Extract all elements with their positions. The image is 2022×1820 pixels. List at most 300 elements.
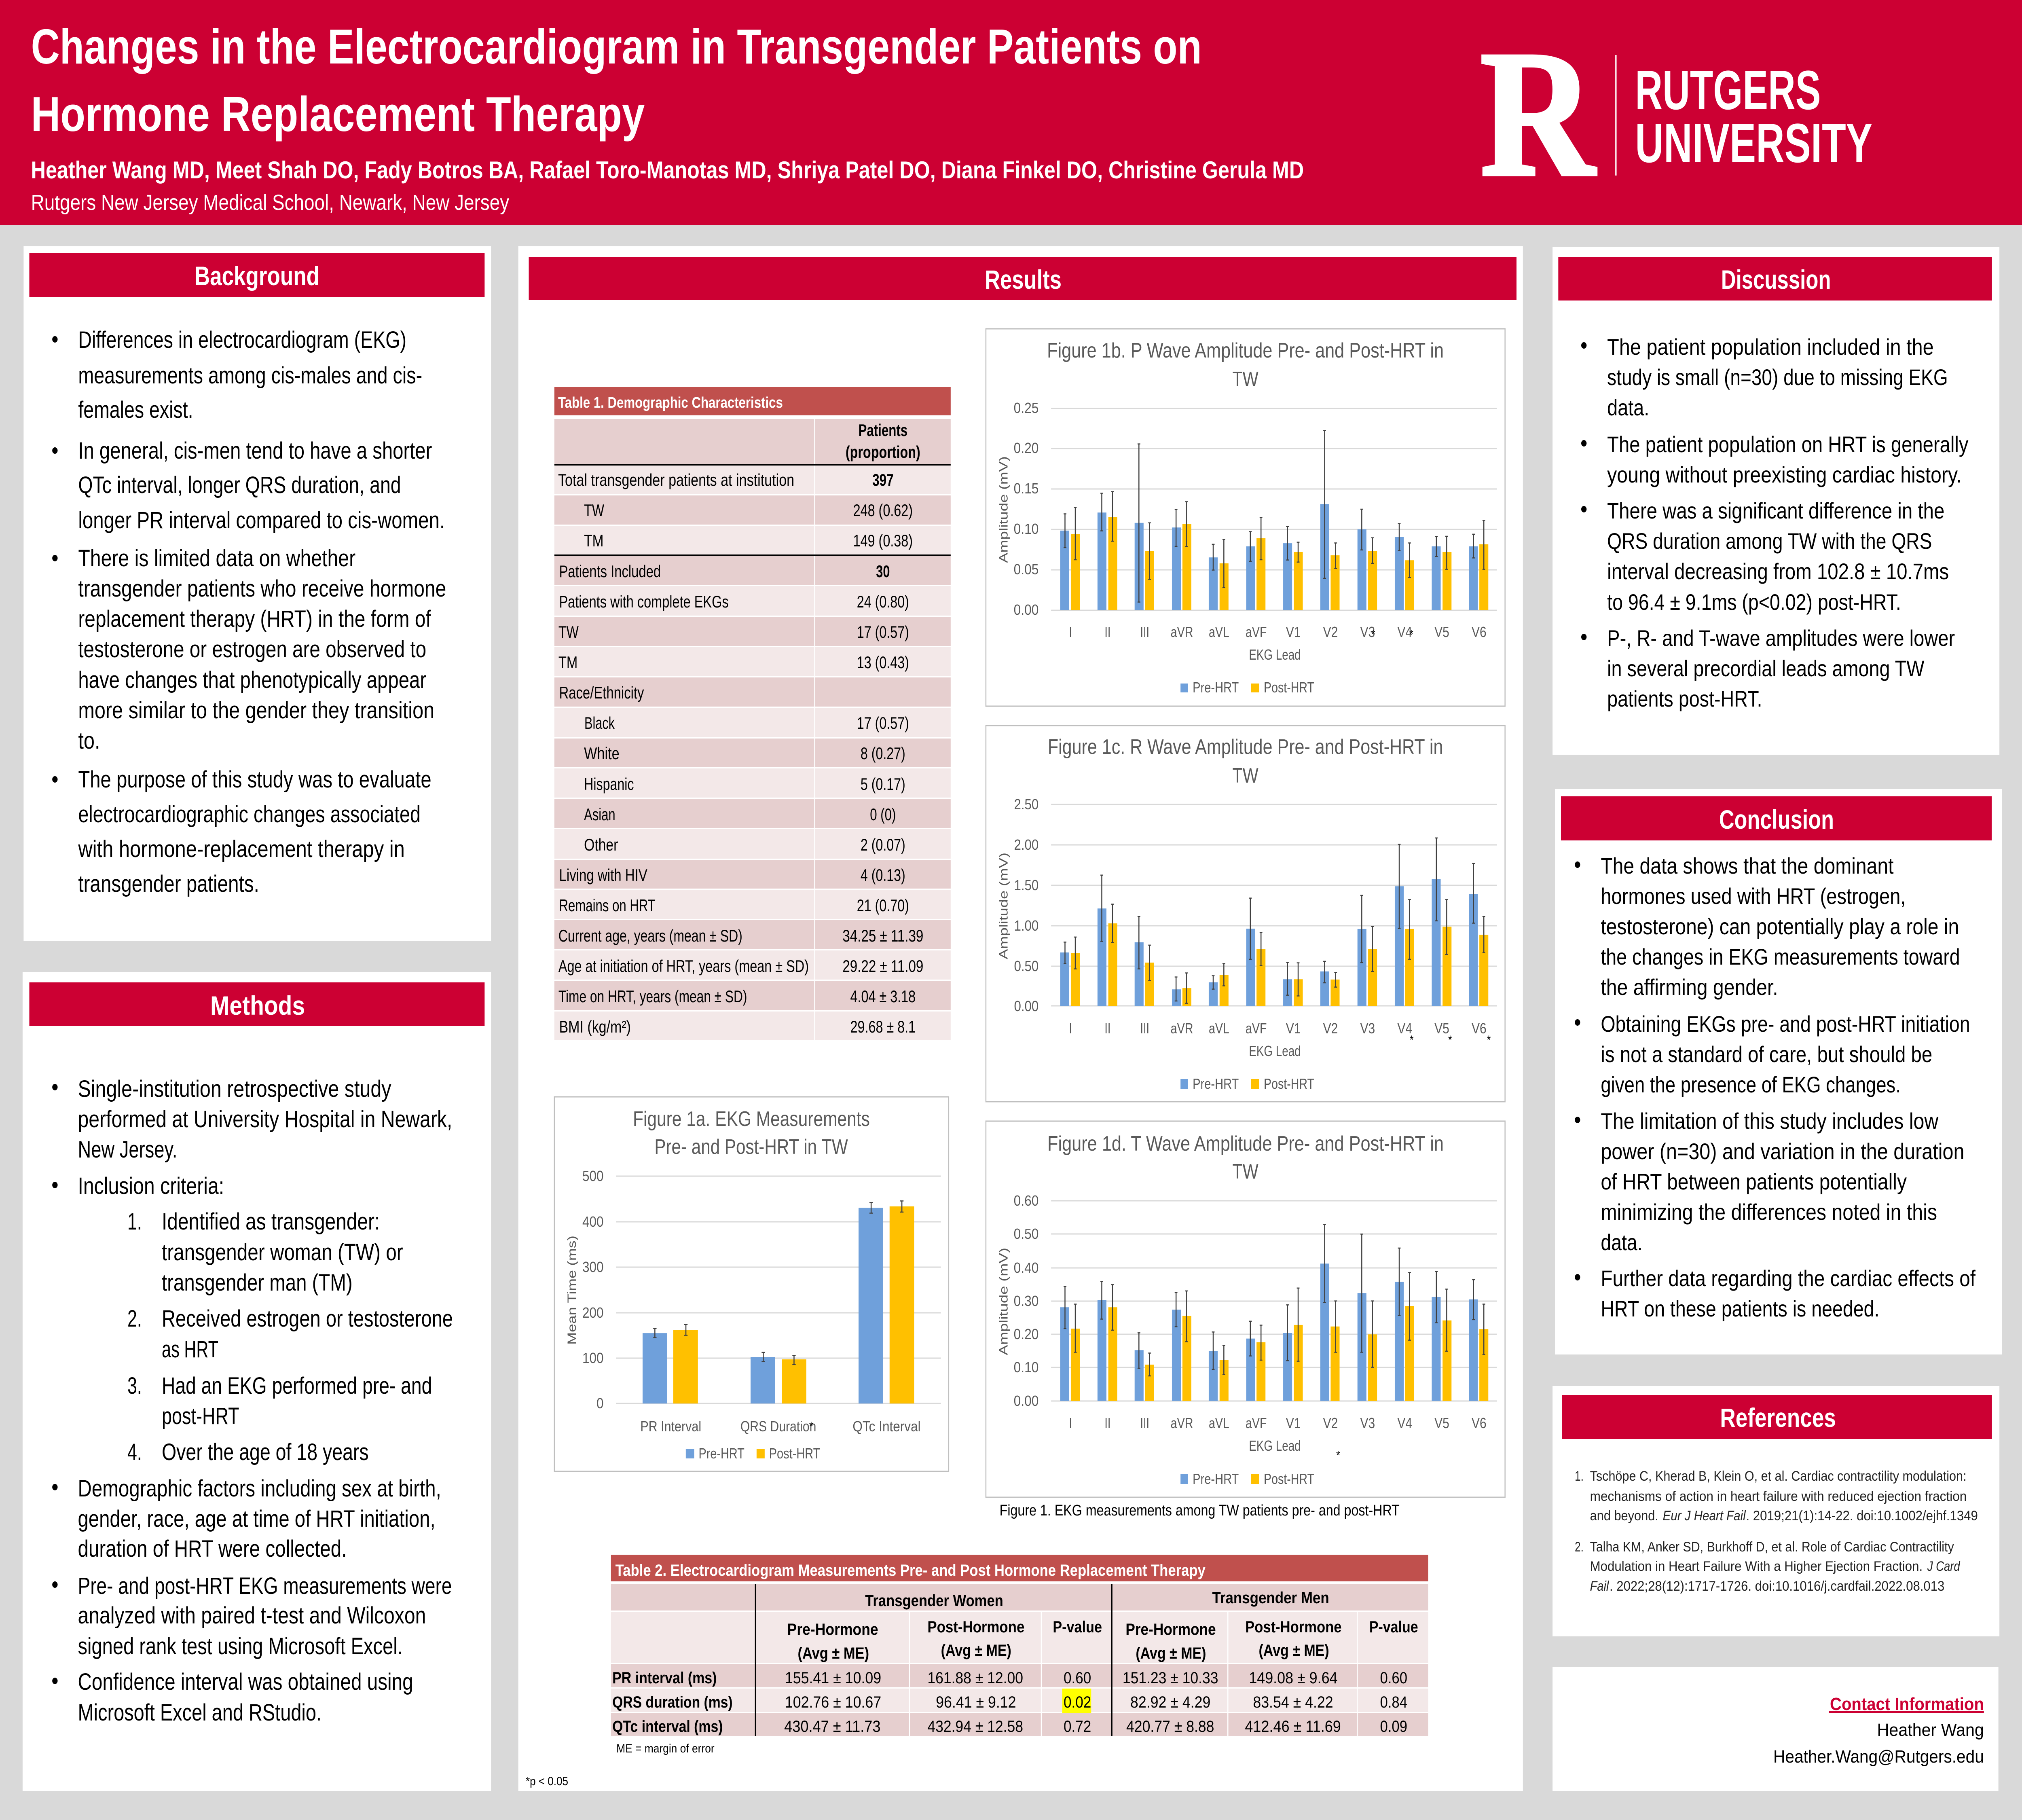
table 1: demographic characteristics: 5 (0.17) bbox=[861, 775, 905, 794]
text block: conclusion bullets: given the presence of EKG changes. bbox=[1601, 1072, 1901, 1097]
table 1: demographic characteristics: 248 (0.62) bbox=[853, 501, 913, 520]
title: Hormone Replacement Therapy bbox=[31, 86, 645, 142]
logo: Rutgers University: RUTGERS bbox=[1635, 59, 1821, 121]
legend 1b: Post-HRT bbox=[1264, 679, 1314, 696]
axis labels 1c: III bbox=[1140, 1020, 1149, 1037]
significance marker 1d: * bbox=[1336, 1448, 1340, 1462]
axis labels 1c bbox=[997, 796, 1487, 1060]
chart title 1a bbox=[633, 1107, 870, 1159]
axis labels 1d: II bbox=[1104, 1415, 1110, 1432]
heading: methods bbox=[29, 982, 484, 1026]
axis labels 1b: EKG Lead bbox=[1249, 647, 1301, 663]
text block: conclusion bullets: data. bbox=[1601, 1230, 1643, 1255]
text block: conclusion bullets: power (n=30) and variation in the duration bbox=[1601, 1139, 1965, 1164]
authors: Heather Wang MD, Meet Shah DO, Fady Botros BA, Rafael Toro-Manotas MD, Shriya Patel DO, Diana Finkel DO, Christine Gerula MD bbox=[31, 157, 1304, 184]
text block: background bullets: replacement therapy (HRT) in the form of bbox=[78, 606, 431, 632]
axis labels 1b: V1 bbox=[1286, 624, 1301, 641]
table 1: demographic characteristics: 397 bbox=[872, 471, 894, 490]
significance markers 1c: * bbox=[1448, 1033, 1452, 1047]
text block: discussion bullets: to 96.4 ± 9.1ms (p<0.02) post-HRT. bbox=[1607, 589, 1901, 615]
table 2: electrocardiogram measurements: 0.72 bbox=[1064, 1717, 1091, 1735]
text block: background bullets: measurements among cis-males and cis- bbox=[78, 363, 422, 389]
table 2: electrocardiogram measurements bbox=[611, 1555, 1428, 1736]
text block: conclusion bullets: The data shows that the dominant bbox=[1601, 853, 1893, 878]
table 2: electrocardiogram measurements: 151.23 ± 10.33 bbox=[1123, 1669, 1218, 1687]
axis labels 1d: V3 bbox=[1360, 1415, 1375, 1432]
table 1: demographic characteristics: Race/Ethnicity bbox=[559, 684, 644, 703]
table 2: electrocardiogram measurements: (Avg ± ME) bbox=[1136, 1644, 1206, 1662]
panel: background bbox=[23, 246, 491, 941]
axis labels 1b: 0.25 bbox=[1014, 400, 1038, 417]
axis labels 1c: V3 bbox=[1360, 1020, 1375, 1037]
table 2: electrocardiogram measurements: 102.76 ± 10.67 bbox=[785, 1693, 881, 1711]
logo: Rutgers University: R bbox=[1480, 14, 1597, 214]
table 2: electrocardiogram measurements: 0.09 bbox=[1380, 1717, 1407, 1735]
heading: results: Results bbox=[985, 265, 1062, 294]
table 2: electrocardiogram measurements: 420.77 ± 8.88 bbox=[1126, 1717, 1214, 1735]
table 1: demographic characteristics: 34.25 ± 11.39 bbox=[842, 927, 923, 946]
text block: reference list: 2. bbox=[1575, 1539, 1584, 1555]
table 1: demographic characteristics: 29.22 ± 11.09 bbox=[842, 957, 923, 976]
legend 1c: Pre-HRT bbox=[1193, 1076, 1239, 1092]
axis labels 1d: 0.00 bbox=[1014, 1393, 1038, 1409]
heading: references: References bbox=[1720, 1403, 1836, 1433]
significance markers 1c: * bbox=[1487, 1033, 1491, 1047]
significance footnote: *p < 0.05 bbox=[526, 1774, 568, 1788]
axis labels 1a bbox=[565, 1168, 921, 1435]
axis labels 1d: Amplitude (mV) bbox=[997, 1248, 1011, 1355]
axis labels 1c: 1.50 bbox=[1014, 877, 1038, 894]
legend 1a bbox=[686, 1445, 820, 1462]
text block: methods bullets: 3. bbox=[127, 1373, 142, 1399]
table 2: electrocardiogram measurements: Post-Hormone bbox=[1245, 1618, 1342, 1636]
text block: methods bullets: Demographic factors including sex at birth, bbox=[78, 1476, 441, 1502]
table 1: demographic characteristics: 4.04 ± 3.18 bbox=[850, 987, 916, 1006]
text block: methods bullets: 1. bbox=[127, 1209, 142, 1235]
axis labels 1d: aVF bbox=[1246, 1415, 1267, 1432]
axis labels 1b: aVL bbox=[1209, 624, 1229, 641]
table 1: demographic characteristics: 4 (0.13) bbox=[861, 866, 905, 885]
text block: methods bullets: Single-institution retrospective study bbox=[78, 1076, 391, 1102]
axis labels 1d: 0.20 bbox=[1014, 1326, 1038, 1343]
logo: Rutgers University bbox=[1480, 14, 1872, 214]
table 1: demographic characteristics: 17 (0.57) bbox=[857, 623, 909, 642]
bars 1c bbox=[1064, 838, 1485, 1006]
axis labels 1d: III bbox=[1140, 1415, 1149, 1432]
table 2: electrocardiogram measurements: QTc interval (ms) bbox=[612, 1717, 723, 1735]
heading: results bbox=[529, 257, 1516, 300]
axis labels 1b: 0.15 bbox=[1014, 480, 1038, 497]
text block: discussion bullets: The patient population on HRT is generally bbox=[1607, 432, 1969, 457]
text block: background bullets: to. bbox=[78, 728, 100, 754]
axis labels 1b: 0.00 bbox=[1014, 602, 1038, 618]
legend 1b bbox=[1180, 679, 1314, 696]
chart title 1d: Figure 1d. T Wave Amplitude Pre- and Post-HRT in bbox=[1047, 1132, 1444, 1155]
chart title 1c: TW bbox=[1233, 764, 1258, 787]
text block: background bullets: females exist. bbox=[78, 397, 193, 423]
significance markers 1b: * bbox=[1409, 627, 1413, 641]
contact details: Heather Wang bbox=[1877, 1720, 1984, 1740]
table 1: demographic characteristics: Patients with complete EKGs bbox=[559, 593, 729, 612]
text block: methods bullets: transgender man (TM) bbox=[162, 1270, 353, 1296]
text block: discussion bullets: P-, R- and T-wave amplitudes were lower bbox=[1607, 625, 1955, 651]
text block: reference list: mechanisms of action in heart failure with reduced ejection fraction bbox=[1590, 1489, 1967, 1504]
chart title 1d: TW bbox=[1233, 1160, 1258, 1183]
text block: methods bullets: analyzed with paired t-test and Wilcoxon bbox=[78, 1603, 426, 1629]
axis labels 1c: V4 bbox=[1397, 1020, 1412, 1037]
axis labels 1a: Mean Time (ms) bbox=[565, 1236, 579, 1345]
table 2: electrocardiogram measurements: Pre-Hormone bbox=[787, 1620, 878, 1638]
contact details: Heather.Wang@Rutgers.edu bbox=[1773, 1746, 1984, 1767]
text block: background bullets: The purpose of this study was to evaluate bbox=[78, 767, 431, 793]
table 1: demographic characteristics: TW bbox=[584, 501, 605, 520]
text block: reference list: J Card bbox=[1927, 1559, 1961, 1574]
axis labels 1a: 100 bbox=[582, 1350, 604, 1367]
text block: background bullets: transgender patients who receive hormone bbox=[78, 576, 446, 602]
text block: discussion bullets: QRS duration among TW with the QRS bbox=[1607, 528, 1932, 554]
legend 1c bbox=[1180, 1076, 1314, 1092]
axis labels 1a: 200 bbox=[582, 1305, 604, 1321]
text block: conclusion bullets: minimizing the differences noted in this bbox=[1601, 1199, 1937, 1225]
axis labels 1a: 400 bbox=[582, 1214, 604, 1230]
text block: reference list: and beyond. bbox=[1590, 1508, 1658, 1524]
table 1: demographic characteristics: TW bbox=[558, 623, 579, 642]
text block: reference list: Talha KM, Anker SD, Burkhoff D, et al. Role of Cardiac Contractility bbox=[1590, 1539, 1954, 1555]
chart title 1b bbox=[1047, 339, 1444, 391]
axis labels 1d: V1 bbox=[1286, 1415, 1301, 1432]
table 2: electrocardiogram measurements: 412.46 ± 11.69 bbox=[1245, 1717, 1341, 1735]
axis labels 1d: 0.60 bbox=[1014, 1193, 1038, 1209]
table 1: demographic characteristics: 21 (0.70) bbox=[857, 896, 909, 915]
heading: discussion: Discussion bbox=[1721, 265, 1831, 294]
text block: methods bullets: performed at University Hospital in Newark, bbox=[78, 1107, 452, 1132]
bars 1a bbox=[653, 1201, 903, 1403]
table 1: demographic characteristics: (proportion) bbox=[846, 443, 920, 462]
text block: background bullets: There is limited data on whether bbox=[78, 546, 355, 571]
text block: background bullets: longer PR interval compared to cis-women. bbox=[78, 508, 445, 533]
table 1: demographic characteristics: 149 (0.38) bbox=[853, 531, 913, 550]
axis labels 1d: EKG Lead bbox=[1249, 1438, 1301, 1454]
text block: methods bullets: Inclusion criteria: bbox=[78, 1173, 224, 1199]
text block: methods bullets: New Jersey. bbox=[78, 1137, 177, 1163]
chart title 1b: TW bbox=[1233, 368, 1258, 391]
axis labels 1b: V5 bbox=[1434, 624, 1449, 641]
panel: results bbox=[518, 246, 1523, 1791]
text block: methods bullets: 2. bbox=[127, 1306, 142, 1332]
significance markers 1c bbox=[1410, 1033, 1491, 1047]
bars 1d bbox=[1064, 1224, 1485, 1401]
table 1: demographic characteristics: TM bbox=[558, 653, 577, 672]
panel: contact information bbox=[1552, 1667, 1999, 1791]
chart: Figure 1a EKG measurements bbox=[554, 1097, 949, 1471]
text block: conclusion bullets: Further data regarding the cardiac effects of bbox=[1601, 1266, 1976, 1291]
text block: background bullets: with hormone-replacement therapy in bbox=[78, 836, 405, 862]
table 2: electrocardiogram measurements: Transgender Women bbox=[865, 1591, 1003, 1610]
axis labels 1c: 2.50 bbox=[1014, 796, 1038, 813]
chart title 1a: Figure 1a. EKG Measurements bbox=[633, 1107, 870, 1131]
text block: reference list bbox=[1575, 1469, 1978, 1594]
legend 1a: Pre-HRT bbox=[699, 1445, 745, 1462]
text block: methods bullets: Over the age of 18 years bbox=[162, 1439, 369, 1465]
axis labels 1c: Amplitude (mV) bbox=[997, 853, 1011, 959]
text block: reference list: Modulation in Heart Failure With a Higher Ejection Fraction. bbox=[1590, 1559, 1923, 1574]
axis labels 1b: II bbox=[1104, 624, 1110, 641]
heading: background: Background bbox=[195, 261, 319, 291]
table 2: electrocardiogram measurements: Post-Hormone bbox=[927, 1618, 1024, 1636]
axis labels 1a: PR Interval bbox=[640, 1418, 701, 1435]
axis labels 1d: 0.30 bbox=[1014, 1293, 1038, 1310]
text block: background bullets: testosterone or estrogen are observed to bbox=[78, 637, 426, 662]
text block: methods bullets: post-HRT bbox=[162, 1403, 239, 1429]
text block: discussion bullets bbox=[1581, 334, 1969, 711]
axis labels 1b: 0.10 bbox=[1014, 521, 1038, 538]
text block: discussion bullets: There was a significant difference in the bbox=[1607, 498, 1944, 523]
text block: background bullets: more similar to the gender they transition bbox=[78, 698, 434, 724]
text block: discussion bullets: study is small (n=30) due to missing EKG bbox=[1607, 364, 1948, 390]
table 2: electrocardiogram measurements: 96.41 ± 9.12 bbox=[936, 1693, 1016, 1711]
text block: conclusion bullets: Obtaining EKGs pre- and post-HRT initiation bbox=[1601, 1011, 1970, 1037]
table 1: demographic characteristics: Asian bbox=[584, 805, 615, 824]
heading: methods: Methods bbox=[210, 990, 305, 1020]
text block: reference list: . 2019;21(1):14-22. doi:10.1002/ejhf.1349 bbox=[1746, 1508, 1978, 1524]
table 1: demographic characteristics: Living with HIV bbox=[559, 866, 647, 885]
axis labels 1b: V6 bbox=[1472, 624, 1487, 641]
table 2: electrocardiogram measurements: PR interval (ms) bbox=[612, 1669, 717, 1687]
text block: conclusion bullets: testosterone) can potentially play a role in bbox=[1601, 914, 1959, 939]
table 2: electrocardiogram measurements: (Avg ± ME) bbox=[1259, 1641, 1329, 1659]
axis labels 1d: V2 bbox=[1323, 1415, 1338, 1432]
table 2: electrocardiogram measurements: 82.92 ± 4.29 bbox=[1130, 1693, 1210, 1711]
table 1: demographic characteristics: Age at initiation of HRT, years (mean ± SD) bbox=[558, 957, 809, 976]
text block: methods bullets: Pre- and post-HRT EKG measurements were bbox=[78, 1573, 452, 1599]
affiliation: Rutgers New Jersey Medical School, Newark, New Jersey bbox=[31, 190, 509, 215]
table 1: demographic characteristics: Other bbox=[584, 836, 618, 855]
axis labels 1c: 0.00 bbox=[1014, 998, 1038, 1015]
axis labels 1c: aVR bbox=[1171, 1020, 1193, 1037]
significance marker 1a: * bbox=[809, 1419, 813, 1433]
chart title 1c: Figure 1c. R Wave Amplitude Pre- and Post-HRT in bbox=[1048, 735, 1443, 759]
axis labels 1c: V6 bbox=[1472, 1020, 1487, 1037]
panel: methods bbox=[23, 972, 491, 1791]
text block: conclusion bullets: HRT on these patients is needed. bbox=[1601, 1296, 1880, 1321]
text block: background bullets: In general, cis-men tend to have a shorter bbox=[78, 438, 432, 464]
text block: background bullets: electrocardiographic changes associated bbox=[78, 802, 421, 827]
axis labels 1b: V2 bbox=[1323, 624, 1338, 641]
text block: background bullets: QTc interval, longer QRS duration, and bbox=[78, 472, 401, 498]
table 1: demographic characteristics: Patients Included bbox=[559, 562, 661, 581]
table 2: electrocardiogram measurements: Table 2. Electrocardiogram Measurements Pre- and Post Hormone Replacement Therapy bbox=[615, 1561, 1206, 1579]
axis labels 1a: 500 bbox=[582, 1168, 604, 1185]
table 1: demographic characteristics: 30 bbox=[876, 562, 890, 581]
axis labels 1c: EKG Lead bbox=[1249, 1043, 1301, 1060]
table 2: electrocardiogram measurements: Pre-Hormone bbox=[1125, 1620, 1216, 1638]
legend 1b: Pre-HRT bbox=[1193, 679, 1239, 696]
text block: background bullets: have changes that phenotypically appear bbox=[78, 667, 426, 693]
axis labels 1c: V5 bbox=[1434, 1020, 1449, 1037]
axis labels 1c: 0.50 bbox=[1014, 958, 1038, 975]
text block: conclusion bullets: of HRT between patients potentially bbox=[1601, 1169, 1907, 1194]
table 1: demographic characteristics: 24 (0.80) bbox=[857, 593, 909, 612]
axis labels 1b: I bbox=[1069, 624, 1072, 641]
panel: conclusion bbox=[1555, 789, 2002, 1354]
axis labels 1c: I bbox=[1069, 1020, 1072, 1037]
axis labels 1d: aVL bbox=[1209, 1415, 1229, 1432]
axis labels 1a: 0 bbox=[596, 1395, 604, 1412]
table 1: demographic characteristics: TM bbox=[584, 531, 604, 550]
text block: methods bullets: signed rank test using Microsoft Excel. bbox=[78, 1634, 403, 1659]
chart: Figure 1b P wave amplitude bbox=[986, 329, 1505, 706]
axis labels 1d: I bbox=[1069, 1415, 1072, 1432]
table 1: demographic characteristics: Time on HRT, years (mean ± SD) bbox=[558, 987, 747, 1006]
table 2: electrocardiogram measurements: 0.60 bbox=[1380, 1669, 1407, 1687]
text block: conclusion bullets: hormones used with HRT (estrogen, bbox=[1601, 883, 1906, 909]
axis labels 1a: 300 bbox=[582, 1259, 604, 1276]
legend 1c: Post-HRT bbox=[1264, 1076, 1314, 1092]
table 2: electrocardiogram measurements: 0.84 bbox=[1380, 1693, 1407, 1711]
axis labels 1d: V6 bbox=[1472, 1415, 1487, 1432]
text block: reference list: Fail bbox=[1590, 1579, 1609, 1594]
table 1: demographic characteristics: 2 (0.07) bbox=[861, 836, 905, 855]
axis labels 1d: V4 bbox=[1397, 1415, 1412, 1432]
figure 1 caption: Figure 1. EKG measurements among TW patients pre- and post-HRT bbox=[1000, 1502, 1400, 1519]
axis labels 1c: aVL bbox=[1209, 1020, 1229, 1037]
text block: methods bullets: as HRT bbox=[162, 1337, 218, 1363]
axis labels 1b: V3 bbox=[1360, 624, 1375, 641]
table 1: demographic characteristics: 0 (0) bbox=[870, 805, 896, 824]
axis labels 1c: 2.00 bbox=[1014, 837, 1038, 853]
axis labels 1c: 1.00 bbox=[1014, 918, 1038, 934]
text block: methods bullets: Received estrogen or testosterone bbox=[162, 1306, 453, 1332]
axis labels 1c: aVF bbox=[1246, 1020, 1267, 1037]
chart title 1a: Pre- and Post-HRT in TW bbox=[654, 1135, 848, 1159]
axis labels 1c: V2 bbox=[1323, 1020, 1338, 1037]
text block: discussion bullets: patients post-HRT. bbox=[1607, 686, 1762, 711]
text block: reference list: Tschöpe C, Kherad B, Klein O, et al. Cardiac contractility modulation: bbox=[1590, 1469, 1967, 1484]
chart: Figure 1d T wave amplitude bbox=[986, 1121, 1505, 1497]
text block: methods bullets: duration of HRT were collected. bbox=[78, 1536, 347, 1562]
table 1: demographic characteristics: Total transgender patients at institution bbox=[558, 471, 794, 490]
text block: conclusion bullets bbox=[1575, 853, 1976, 1321]
axis labels 1c: V1 bbox=[1286, 1020, 1301, 1037]
legend 1d bbox=[1180, 1471, 1314, 1488]
panel: references bbox=[1552, 1386, 1999, 1636]
table 1: demographic characteristics: White bbox=[584, 744, 620, 763]
text block: discussion bullets: The patient population included in the bbox=[1607, 334, 1934, 360]
table 2: electrocardiogram measurements: QRS duration (ms) bbox=[612, 1693, 733, 1711]
text block: discussion bullets: young without preexisting cardiac history. bbox=[1607, 462, 1962, 487]
heading: background bbox=[29, 253, 484, 297]
axis labels 1b bbox=[997, 400, 1487, 663]
axis labels 1d: V5 bbox=[1434, 1415, 1449, 1432]
chart title 1b: Figure 1b. P Wave Amplitude Pre- and Post-HRT in bbox=[1047, 339, 1444, 362]
text block: reference list: Eur J Heart Fail bbox=[1663, 1508, 1746, 1524]
significance markers 1b bbox=[1371, 627, 1413, 641]
title bbox=[31, 19, 1202, 142]
table 2: electrocardiogram measurements: 0.02 bbox=[1064, 1693, 1091, 1711]
text block: background bullets: Differences in electrocardiogram (EKG) bbox=[78, 327, 406, 353]
axis labels 1d: 0.10 bbox=[1014, 1359, 1038, 1376]
text block: background bullets bbox=[52, 327, 446, 897]
axis labels 1b: Amplitude (mV) bbox=[997, 456, 1011, 563]
table 1: demographic characteristics: Current age, years (mean ± SD) bbox=[558, 927, 742, 946]
axis labels 1b: aVF bbox=[1246, 624, 1267, 641]
significance markers 1b: * bbox=[1371, 627, 1375, 641]
chart title 1c bbox=[1048, 735, 1443, 787]
text block: conclusion bullets: the affirming gender. bbox=[1601, 974, 1778, 1000]
table 2: electrocardiogram measurements: (Avg ± ME) bbox=[798, 1644, 869, 1662]
significance markers 1c: * bbox=[1410, 1033, 1414, 1047]
table 2: electrocardiogram measurements: (Avg ± ME) bbox=[941, 1641, 1011, 1659]
axis labels 1d: 0.50 bbox=[1014, 1226, 1038, 1242]
table 1: demographic characteristics: 13 (0.43) bbox=[857, 653, 909, 672]
heading: references bbox=[1562, 1395, 1992, 1439]
bars 1b bbox=[1064, 430, 1485, 610]
axis labels 1a: QTc Interval bbox=[852, 1418, 921, 1435]
axis labels 1c: II bbox=[1104, 1020, 1110, 1037]
chart: Figure 1c R wave amplitude bbox=[986, 726, 1505, 1102]
table 1: demographic characteristics: Hispanic bbox=[584, 775, 634, 794]
axis labels 1b: III bbox=[1140, 624, 1149, 641]
chart title 1d bbox=[1047, 1132, 1444, 1183]
text block: methods bullets: 4. bbox=[127, 1439, 142, 1465]
axis labels 1b: 0.05 bbox=[1014, 561, 1038, 578]
table 1: demographic characteristics: Remains on HRT bbox=[559, 896, 656, 915]
text block: reference list: . 2022;28(12):1717-1726. doi:10.1016/j.cardfail.2022.08.013 bbox=[1610, 1579, 1944, 1594]
table 2: electrocardiogram measurements: P-value bbox=[1053, 1618, 1102, 1636]
logo: Rutgers University: UNIVERSITY bbox=[1635, 112, 1872, 174]
axis labels 1d: 0.40 bbox=[1014, 1260, 1038, 1276]
text block: conclusion bullets: is not a standard of care, but should be bbox=[1601, 1041, 1932, 1067]
axis labels 1b: aVR bbox=[1171, 624, 1193, 641]
axis labels 1a: QRS Duration bbox=[740, 1418, 816, 1435]
text block: conclusion bullets: The limitation of this study includes low bbox=[1601, 1108, 1939, 1134]
contact details bbox=[1773, 1720, 1984, 1767]
axis labels 1b: V4 bbox=[1397, 624, 1412, 641]
table 2: electrocardiogram measurements: 161.88 ± 12.00 bbox=[927, 1669, 1023, 1687]
text block: discussion bullets: in several precordial leads among TW bbox=[1607, 656, 1925, 681]
legend 1d: Post-HRT bbox=[1264, 1471, 1314, 1488]
table 1: demographic characteristics: BMI (kg/m²) bbox=[559, 1018, 631, 1037]
table 1: demographic characteristics: 17 (0.57) bbox=[857, 714, 909, 733]
table 1: demographic characteristics: 29.68 ± 8.1 bbox=[850, 1018, 916, 1037]
text block: methods bullets: Had an EKG performed pre- and bbox=[162, 1373, 432, 1399]
header banner bbox=[0, 0, 2022, 225]
table 1: demographic characteristics: 8 (0.27) bbox=[861, 744, 905, 763]
table 2: electrocardiogram measurements: 0.60 bbox=[1064, 1669, 1091, 1687]
table 2 footnote: ME = margin of error bbox=[616, 1742, 715, 1755]
text block: methods bullets: Confidence interval was obtained using bbox=[78, 1669, 413, 1695]
text block: methods bullets: transgender woman (TW) or bbox=[162, 1240, 403, 1266]
table 2: electrocardiogram measurements: 83.54 ± 4.22 bbox=[1253, 1693, 1333, 1711]
axis labels 1d: aVR bbox=[1171, 1415, 1193, 1432]
contact heading: Contact Information bbox=[1830, 1694, 1984, 1714]
panel: discussion bbox=[1552, 247, 1999, 755]
table 2: electrocardiogram measurements: 430.47 ± 11.73 bbox=[784, 1717, 881, 1735]
table 2: electrocardiogram measurements: 149.08 ± 9.64 bbox=[1249, 1669, 1338, 1687]
text block: methods bullets: Microsoft Excel and RStudio. bbox=[78, 1700, 321, 1726]
text block: reference list: 1. bbox=[1575, 1469, 1584, 1484]
table 1: demographic characteristics: Patients bbox=[859, 421, 907, 440]
table 2: electrocardiogram measurements: 432.94 ± 12.58 bbox=[927, 1717, 1023, 1735]
title: Changes in the Electrocardiogram in Transgender Patients on bbox=[31, 19, 1202, 74]
text block: discussion bullets: interval decreasing from 102.8 ± 10.7ms bbox=[1607, 559, 1949, 584]
heading: discussion bbox=[1558, 257, 1992, 301]
heading: conclusion: Conclusion bbox=[1719, 804, 1834, 834]
text block: discussion bullets: data. bbox=[1607, 395, 1649, 420]
table 1: demographic characteristics: Table 1. Demographic Characteristics bbox=[558, 394, 783, 411]
text block: conclusion bullets: the changes in EKG measurements toward bbox=[1601, 944, 1960, 969]
text block: methods bullets: Identified as transgender: bbox=[162, 1209, 380, 1235]
